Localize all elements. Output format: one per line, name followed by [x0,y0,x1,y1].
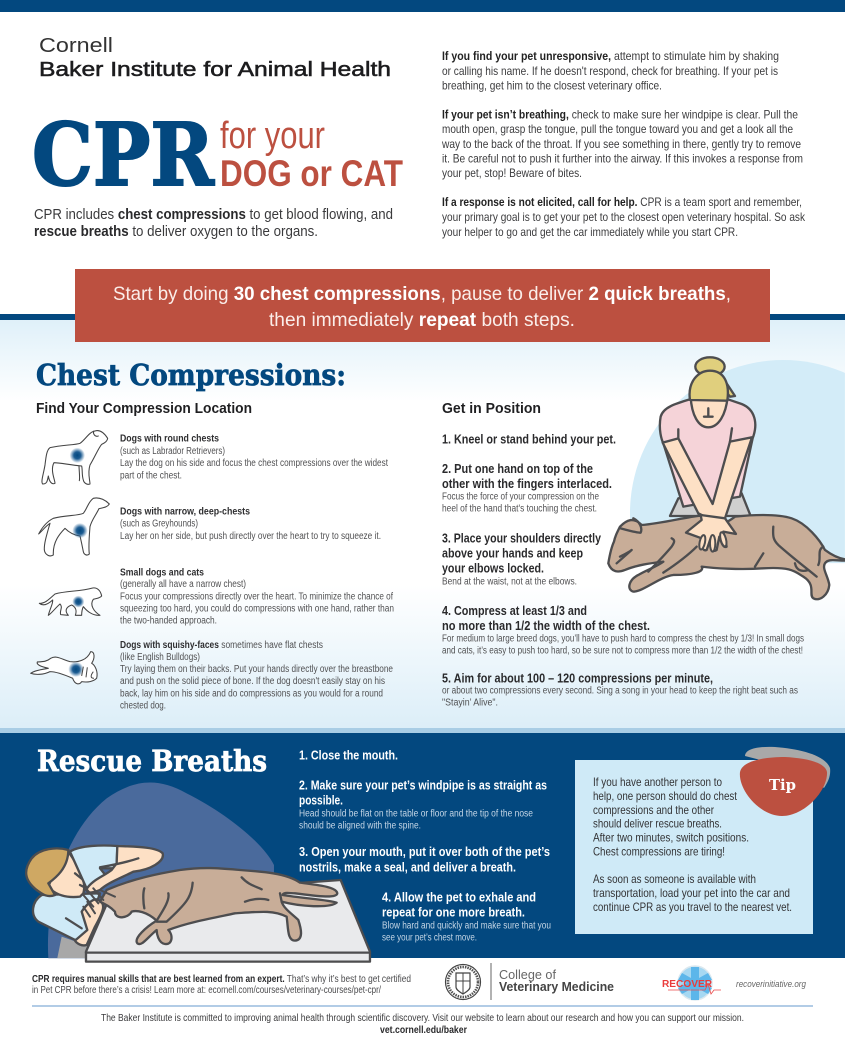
institute logotype [39,34,391,81]
first steps text: If a response is not elicited, call for help. CPR is a team sport and remember, [442,195,802,209]
mission statement: vet.cornell.edu/baker [380,1025,467,1036]
table [86,880,370,962]
position steps: above your hands and keep [442,546,583,560]
rescue steps: repeat for one more breath. [382,906,525,920]
first steps text [441,49,805,239]
rescue steps: 1. Close the mouth. [299,748,398,762]
first steps text: your pet, stop! Beware of bites. [442,166,582,180]
icon: round-chest dog [42,431,108,484]
dog [100,868,337,944]
position steps: 3. Place your shoulders directly [442,532,601,546]
compression location text: Lay her on her side, but push directly over the heart to try to squeeze it. [120,531,381,542]
tip panel: help, one person should do chest [593,789,738,803]
college logotype [490,963,614,1000]
position steps: other with the fingers interlaced. [442,477,612,491]
compression location text: Try laying them on their backs. Put your hands directly over the breastbone [120,664,393,675]
compression location text: Dogs with round chests [120,434,219,444]
institute logotype: Cornell [39,34,113,57]
hands [83,888,115,917]
banner: Start by doing 30 chest compressions, pause to deliver 2 quick breaths, [113,283,731,305]
compression location text: chested dog. [120,700,166,712]
head [691,397,728,427]
title: for your [220,115,325,157]
recover url: recoverinitiative.org [736,979,806,989]
compression location text: Dogs with narrow, deep-chests [120,506,250,518]
position steps: 4. Compress at least 1/3 and [442,604,587,618]
first steps text: If you find your pet unresponsive, attempt to stimulate him by shaking [442,49,779,63]
first steps text: breathing, get him to the closest veterinary office. [442,78,662,92]
compression location text: Small dogs and cats [120,568,204,578]
rescue steps: 4. Allow the pet to exhale and [382,890,536,904]
footer note: in Pet CPR before there’s a crisis! Learn more at: ecornell.com/courses/veterinary-courses/pet-cpr/ [32,985,381,996]
tip badge [740,747,830,816]
fingers [698,532,728,552]
position steps: "Stayin’ Alive". [442,698,498,708]
heading: find your compression location: Find Your Compression Location [36,401,252,417]
position steps: your elbows locked. [442,562,544,576]
mission statement: The Baker Institute is committed to improving animal health through scientific discovery. Visit our website to learn about our research and how you can support our mission. [101,1013,744,1024]
back shoulder [33,893,100,940]
tip panel: If you have another person to [593,775,722,789]
upper arm and sleeve [70,846,117,890]
compression location text: the two-handed approach. [120,616,217,626]
rescue steps [299,748,551,944]
position steps: Bend at the waist, not at the elbows. [442,576,577,588]
icon: small dog or cat [39,588,102,615]
position steps [442,432,804,708]
compression location text: and push on the solid piece of bone. If the dog doesn't easily stay on his [120,676,385,687]
first steps text: your helper to go and get the car immediately while you start CPR. [442,225,738,239]
position steps: Focus the force of your compression on the [442,492,599,502]
institute logotype: Baker Institute for Animal Health [39,58,391,81]
tip panel: After two minutes, switch positions. [593,830,749,844]
shirt [660,398,755,507]
dog details [617,518,823,577]
title: CPR [32,105,214,206]
rescue steps: 2. Make sure your pet’s windpipe is as straight as [299,778,547,792]
first steps text: or calling his name. If he doesn't respond, check for breathing. If your pet is [442,64,778,78]
heading: chest compressions: Chest Compressions: [36,358,346,392]
dog body [608,515,845,599]
compression location text: (such as Greyhounds) [120,518,198,530]
rescue steps: nostrils, make a seal, and deliver a breath. [299,860,516,874]
rescue steps: should be aligned with the spine. [299,820,421,832]
compression location text: back, lay him on his side and do compressions as you would for a round [120,688,383,700]
tip badge: Tip [769,776,796,794]
footer note [32,974,411,996]
hands over dog [686,515,736,551]
intro text [34,207,393,240]
title [32,105,403,206]
tip panel [575,760,813,934]
banner: then immediately repeat both steps. [269,309,575,331]
compression location text: (such as Labrador Retrievers) [120,446,225,457]
rescue steps: Head should be flat on the table or floor and the tip of the nose [299,808,533,820]
position steps: heel of the hand that's touching the chest. [442,504,597,514]
intro text: rescue breaths to deliver oxygen to the organs. [34,224,318,240]
position steps: 2. Put one hand on top of the [442,462,593,476]
ponytail [720,378,735,397]
compression location text: part of the chest. [120,470,182,482]
intro text: CPR includes chest compressions to get blood flowing, and [34,207,393,223]
recover logo [662,966,721,1000]
position steps: 1. Kneel or stand behind your pet. [442,432,616,446]
compression location text [120,434,394,712]
tip panel: Chest compressions are tiring! [593,844,725,858]
compression location text: (like English Bulldogs) [120,652,200,663]
arms [663,437,752,551]
compression location text: Lay the dog on his side and focus the chest compressions over the widest [120,458,388,469]
compression location text: Focus your compressions directly over the heart. To minimize the chance of [120,592,393,602]
tip panel: continue CPR as you travel to the nearest vet. [593,900,792,914]
compression location text: (generally all have a narrow chest) [120,579,246,590]
icon: squishy-faced dog on back [31,652,97,684]
first steps text: mouth open, grasp the tongue, pull the tongue toward you and get a look all the [442,122,793,136]
compression location text: squeezing too hard, you could do compressions with one hand, rather than [120,604,394,614]
cornell seal [446,964,480,1000]
illustration: chest compressions on dog [607,356,845,600]
footer note: CPR requires manual skills that are best learned from an expert. That’s why it’s best to get certified [32,974,411,985]
rescue steps: Blow hard and quickly and make sure that you [382,920,551,932]
tip panel: compressions and the other [593,803,714,817]
college logotype: College of [499,968,557,982]
tip panel: transportation, load your pet into the car and [593,886,790,900]
position steps: no more than 1/2 the width of the chest. [442,619,650,633]
arm lower [75,899,103,945]
position steps: 5. Aim for about 100 – 120 compressions per minute, [442,672,713,686]
heading: get in position: Get in Position [442,401,541,417]
icon: deep-chest dog [39,498,109,556]
recover logo: RECOVER [662,978,712,990]
mission statement [101,1013,744,1036]
college logotype: Veterinary Medicine [499,980,614,994]
first steps text: If your pet isn’t breathing, check to make sure her windpipe is clear. Pull the [442,108,798,122]
heading: rescue breaths: Rescue Breaths [37,744,267,778]
rescue steps: possible. [299,794,343,808]
illustration: rescue breaths [26,783,370,962]
title: DOG or CAT [220,153,403,194]
legs [670,493,751,516]
compression location text: Dogs with squishy-faces sometimes have flat chests [120,640,323,651]
tip panel: As soon as someone is available with [593,872,756,886]
rescue steps: 3. Open your mouth, put it over both of the pet’s [299,845,550,859]
tip panel: should deliver rescue breaths. [593,816,722,830]
rescue steps: see your pet’s chest move. [382,932,477,944]
head [48,852,84,897]
grey body [57,937,90,958]
banner [75,269,770,342]
